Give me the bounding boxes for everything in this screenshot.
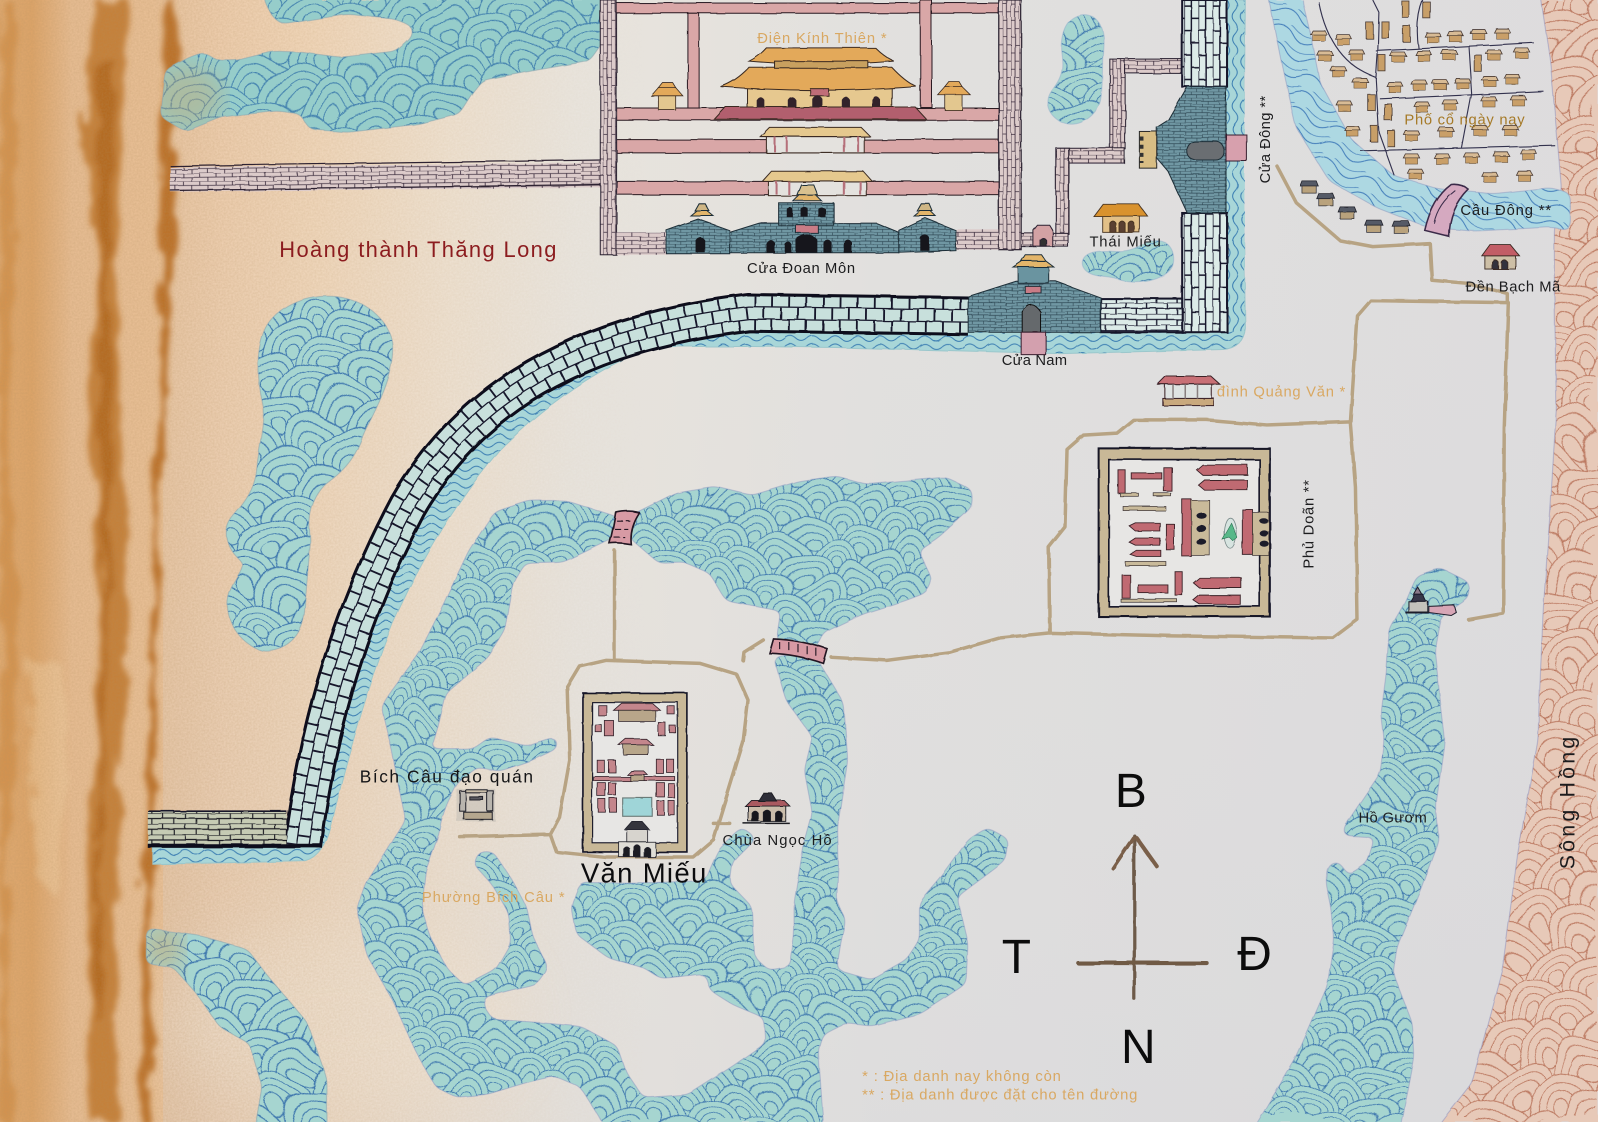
hall pavilions [760, 127, 872, 196]
label: Cầu Đông: Cầu Đông ** [1460, 203, 1551, 219]
pond: beside Thái Miếu [1082, 240, 1174, 283]
compound: Phủ Doãn [1099, 448, 1270, 617]
pink terraces [617, 0, 999, 195]
label: đình Quảng Văn: đình Quảng Văn * [1217, 384, 1346, 400]
compass letter: N: N [1121, 1021, 1156, 1074]
label: Cửa Nam: Cửa Nam [1002, 353, 1067, 369]
bridge: road to Hồ Gươm [769, 639, 828, 663]
lake system around Văn Miếu [356, 499, 1008, 1122]
label: Cửa Đoan Môn: Cửa Đoan Môn [747, 261, 855, 277]
label: Văn Miếu: Văn Miếu [581, 858, 706, 889]
connecting inner walls [1021, 59, 1182, 247]
temple and bridge on Hồ Gươm [1405, 587, 1456, 616]
compound: Văn Miếu [583, 693, 687, 857]
lake: north-east of Văn Miếu [632, 476, 973, 645]
curved rampart wall [303, 313, 968, 846]
side pavilions [651, 82, 970, 110]
Văn Miếu gate [619, 821, 655, 857]
label: Phủ Doãn: Phủ Doãn ** [1302, 480, 1318, 569]
label: Bích Câu đạo quán: Bích Câu đạo quán [360, 767, 533, 787]
label: Cửa Đông: Cửa Đông ** [1258, 96, 1274, 183]
compass letter: T: T [1002, 931, 1031, 984]
legend: place names used for streets: ** : Địa danh được đặt cho tên đường [862, 1088, 1137, 1104]
building: Đền Bạch Mã [1482, 245, 1520, 269]
building: Thái Miếu [1094, 204, 1148, 232]
gate: Cửa Nam [968, 255, 1101, 355]
label: Hồ Gươm: Hồ Gươm [1359, 810, 1427, 826]
old quarter: streets and houses [1300, 0, 1555, 233]
moat around the citadel [153, 0, 1245, 864]
east wall with courses [1101, 0, 1227, 332]
straight west road wall [170, 160, 601, 192]
title: Hoàng thành Thăng Long: Hoàng thành Thăng Long [279, 237, 556, 262]
label: Đền Bạch Mã: Đền Bạch Mã [1466, 279, 1561, 295]
building: Điện Kính Thiên [714, 48, 926, 119]
lake: bottom left [146, 928, 328, 1122]
citadel: inner palace [581, 0, 1021, 255]
building: đình Quảng Văn [1158, 376, 1220, 406]
legend: place names no longer exist: * : Địa danh nay không còn [862, 1069, 1061, 1085]
west wall stub [148, 811, 322, 846]
label: Chùa Ngọc Hồ: Chùa Ngọc Hồ [723, 833, 832, 849]
label: Phường Bích Câu: Phường Bích Câu * [422, 890, 565, 906]
palace walls [581, 0, 1021, 255]
label: Sông Hồng: Sông Hồng [1556, 737, 1580, 869]
lake: Hồ Gươm [1257, 568, 1470, 1122]
compass rose lines [1078, 836, 1207, 999]
stream by Cầu Đông [1268, 0, 1572, 232]
lake: top left [160, 0, 600, 133]
label: Phố cổ ngày nay: Phố cổ ngày nay [1404, 112, 1525, 128]
gate: Cửa Đông [1139, 87, 1246, 213]
labels [279, 31, 1580, 1104]
roads [460, 166, 1508, 857]
compass letter: Đ: Đ [1237, 928, 1272, 981]
compass letter: B: B [1115, 765, 1147, 818]
building: Chùa Ngọc Hồ [743, 793, 790, 823]
gate: Đoan Môn [667, 184, 956, 254]
label: Điện Kính Thiên: Điện Kính Thiên * [757, 31, 887, 47]
pond: west of the wall [225, 295, 394, 652]
pond: north of Thái Miếu [1047, 14, 1105, 125]
left parchment edge band [0, 0, 652, 1122]
river: Sông Hồng [1442, 0, 1598, 1122]
bridge: Cầu Đông [1425, 184, 1469, 236]
label: Thái Miếu: Thái Miếu [1089, 235, 1161, 251]
bridge: north lake [609, 511, 639, 544]
building: Bích Câu đạo quán [457, 789, 495, 821]
